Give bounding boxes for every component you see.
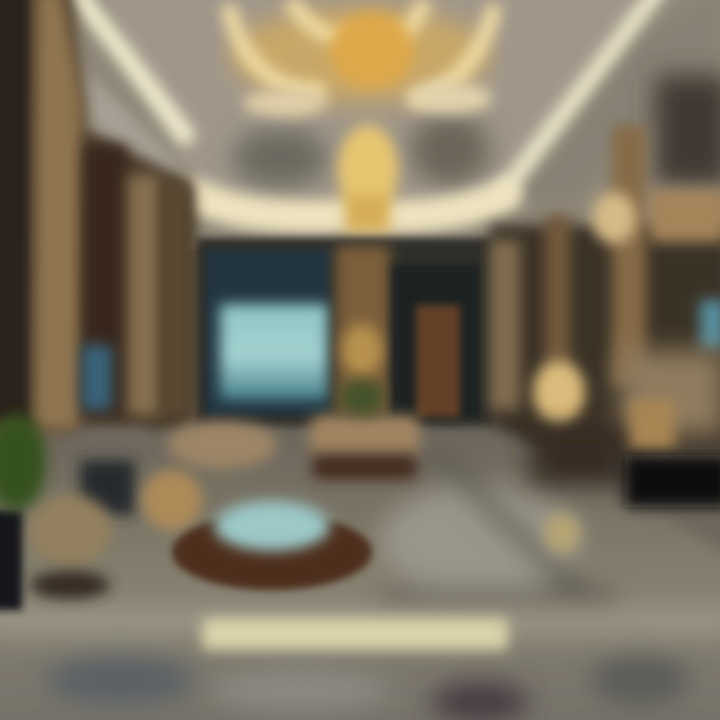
plant (0, 414, 46, 610)
floor (0, 428, 720, 720)
doorway (392, 265, 480, 420)
window (220, 304, 328, 400)
floor light strip (202, 618, 508, 650)
sofa: rear (310, 415, 420, 479)
sofa: left seating (28, 421, 277, 599)
back wall (195, 238, 495, 430)
coffee table (172, 501, 372, 590)
ceiling (0, 0, 720, 250)
centre column (336, 245, 390, 415)
floor reflection (544, 513, 580, 553)
small plant (340, 379, 384, 415)
right furniture (530, 400, 720, 507)
ceiling cove lights (75, 0, 658, 216)
chandelier (228, 0, 495, 233)
column lamp (342, 324, 382, 376)
left columns (0, 0, 195, 430)
lamp (533, 360, 585, 424)
right columns (490, 125, 720, 450)
floor marble veining (0, 450, 720, 720)
